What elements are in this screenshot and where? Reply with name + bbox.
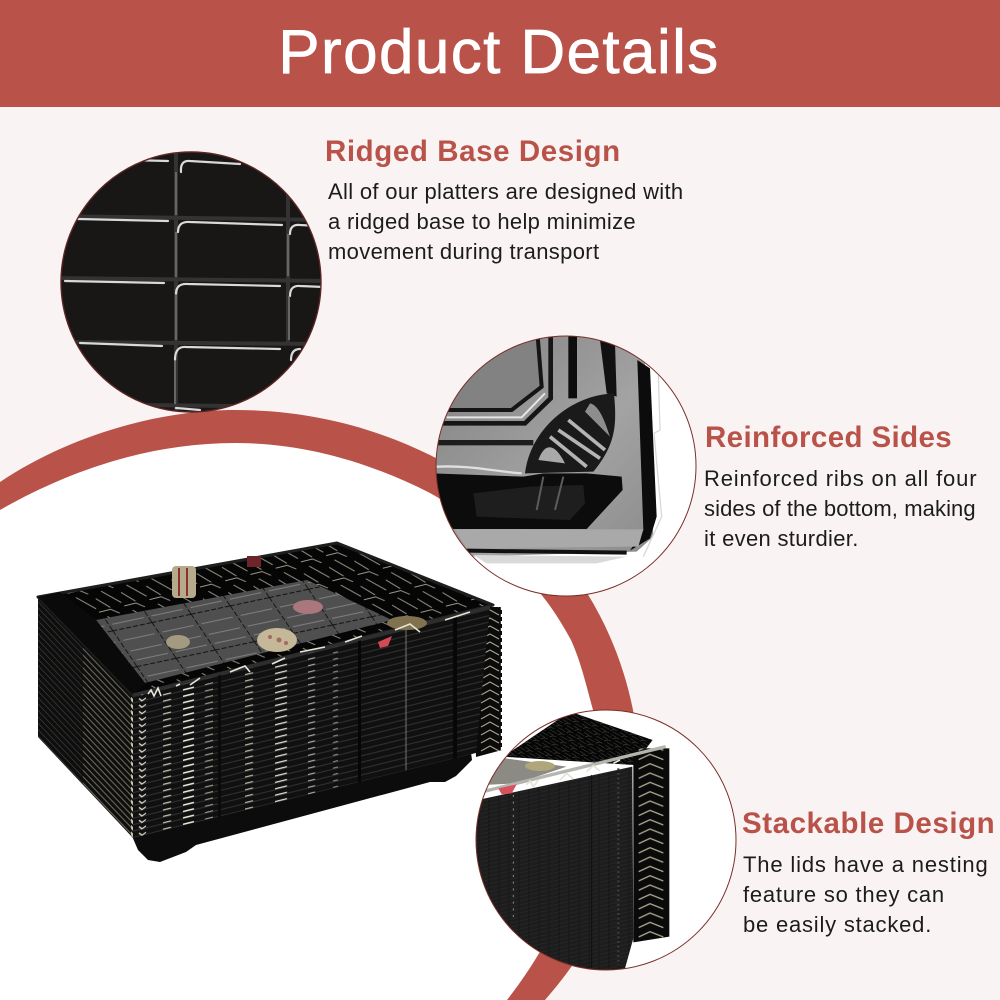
title: Product Details (278, 18, 720, 87)
detail circle: stackable design (470, 710, 736, 977)
white interior below arc (0, 443, 597, 1000)
heading: ridged base: Ridged Base Design (325, 135, 621, 168)
tray white rim scribble (148, 612, 470, 696)
illustration layer: arc, tray and detail circles (0, 151, 736, 1000)
text: reinforced sides (704, 466, 977, 551)
tray back-right edge (472, 607, 502, 757)
tray decorations (166, 556, 427, 652)
text: stackable design (743, 852, 989, 937)
text: reinforced sides: it even sturdier. (704, 526, 859, 551)
text: ridged base: movement during transport (328, 239, 599, 264)
tray base with feet (132, 745, 472, 862)
tray floor (96, 580, 392, 683)
text: stackable design: The lids have a nesting (743, 852, 989, 877)
text: ridged base (328, 179, 683, 264)
tray front face (133, 607, 490, 838)
heading: reinforced sides: Reinforced Sides (705, 421, 952, 454)
text: ridged base: All of our platters are designed with (328, 179, 683, 204)
tray inner wall (38, 543, 493, 695)
text: reinforced sides: sides of the bottom, making (704, 496, 976, 521)
detail circle: ridged base (50, 150, 330, 412)
red arc (0, 410, 638, 1000)
detail circle: reinforced sides (430, 323, 696, 596)
tray left face (38, 597, 133, 838)
text: stackable design: feature so they can (743, 882, 945, 907)
text: ridged base: a ridged base to help minimize (328, 209, 636, 234)
heading: stackable design: Stackable Design (742, 807, 995, 840)
text: reinforced sides: Reinforced ribs on all four (704, 466, 977, 491)
header band (0, 0, 1000, 107)
stacked tray photo (38, 543, 502, 862)
text: stackable design: be easily stacked. (743, 912, 932, 937)
